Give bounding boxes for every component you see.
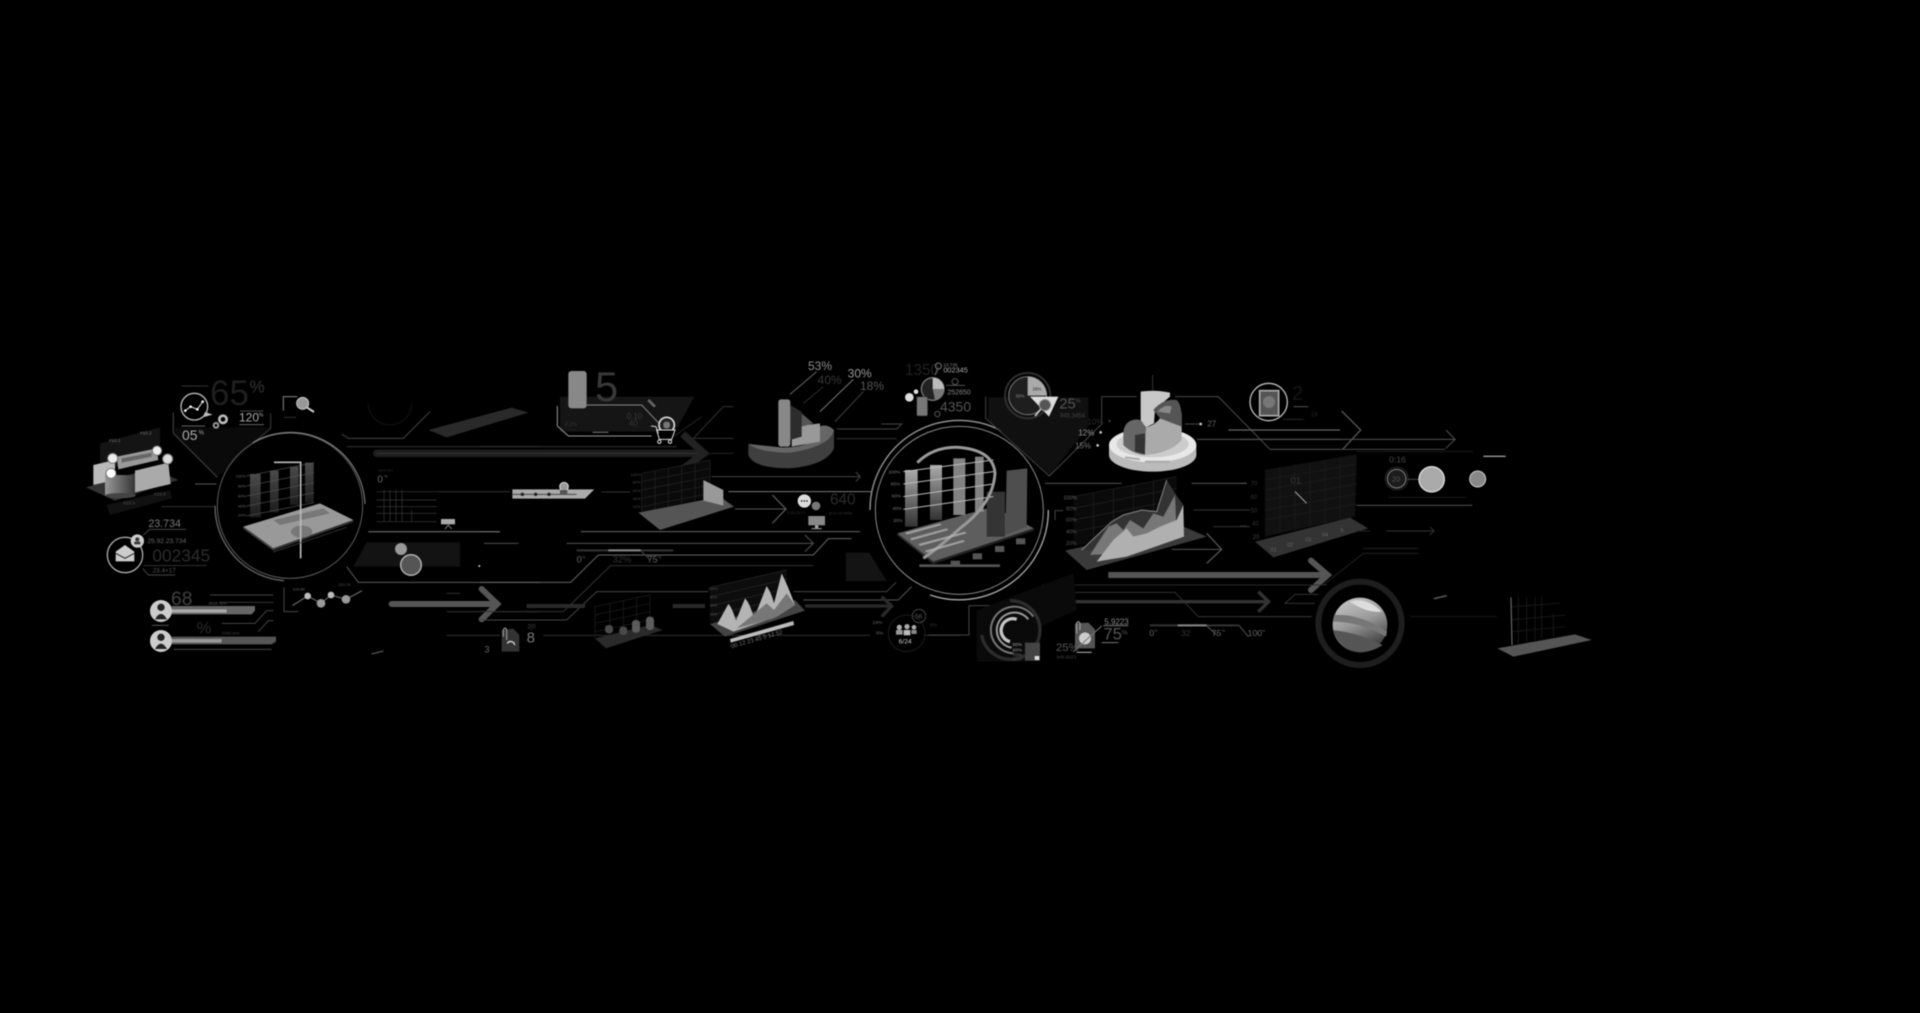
user progress bars [150,589,276,652]
region: middle-left section [480,359,960,655]
percentage labels [790,359,884,422]
file icon with stats: 25% [1056,642,1079,654]
pie panel: 945.3454 [1060,414,1086,420]
circuit lines: right [928,397,1340,635]
arrow: thick gray [392,589,497,619]
arrow: thin upper [712,472,860,482]
3D block chart: #10.3 [123,501,135,506]
tablet side details: 16 [1311,412,1318,419]
dial: main bar chart: 20% [893,518,903,523]
3D block chart: #10.1 [109,438,121,443]
icon: magnifier [283,397,314,417]
arrow: medium dark [1072,592,1269,612]
percentage labels: 53% [808,359,832,373]
phone and cart panel: 0.10 [627,412,643,421]
icon: tablet ring: 2 [1292,383,1303,405]
radial ring chart: 70% [1013,652,1022,657]
stats cluster: 4350: 252650 [947,389,971,396]
panel: 65 percent gauge: 65 [210,374,249,413]
dark grid chart [1251,454,1368,557]
panel: 65 percent gauge: % [259,413,264,419]
radial ring chart: 50% [1013,642,1022,647]
pie leader labels: 15% [1075,441,1091,450]
region: right section [1240,407,1592,665]
iso chart with panel: 60% [633,488,641,493]
mini line chart [292,582,362,608]
progress scale [577,550,673,565]
percentage labels: 18% [860,379,884,393]
small cylinder chart [595,594,663,648]
dark grid chart: 40 [1252,522,1259,528]
3D block chart: #10.2 [140,430,152,435]
small grid chart: 0 [377,474,383,485]
circle chart: left dial [215,432,365,581]
region: centre section [870,362,1340,662]
dark grid chart: 01 [1291,475,1301,485]
dial: main bar chart: 100% [888,469,900,474]
arrow: double chevrons [1240,411,1455,449]
circle chart: left dial: 60% [238,493,246,498]
circle indicators [1385,454,1486,492]
chat and monitor icon: 640 [830,491,856,508]
email counter: 23.4+17 [153,568,176,575]
3D block chart [86,427,178,515]
area chart: 80% [1066,507,1077,513]
area chart: 20% [1066,541,1077,547]
file icon with stats: % [1122,630,1128,637]
progress scale right [1149,625,1265,638]
panel: 65 percent gauge: 120 [239,411,259,425]
pie panel: 25% [1033,387,1041,392]
file icon with stats: 945.9223 [1057,655,1076,660]
pie leader labels [1075,417,1217,450]
dial: main bar chart [870,420,1048,600]
circuit lines [480,407,960,635]
chat and monitor icon: @12.23.4566 [828,511,853,516]
iso chart with panel: 100% [631,472,641,477]
stats cluster: 4350: 4350 [940,399,971,415]
dark grid chart: 70 [1251,482,1258,488]
progress scale: 32% [613,555,631,565]
mountain chart: 80% [710,595,718,599]
dark grid chart: 50 [1251,508,1258,514]
mountain chart: 40% [710,612,718,616]
team counter [872,609,938,652]
user progress bars: 2018.78% [208,600,227,605]
progress scale: 0 [577,555,582,565]
arrow: thin lower [567,535,813,552]
dark grid chart: 60 [1251,495,1258,501]
email counter: 002345 [152,546,210,566]
tablet side details [1283,407,1318,419]
dark grid chart: 03 [1305,538,1311,544]
file icon with stats [1056,617,1129,660]
email counter: 23.734 [148,518,181,530]
arrow: to people icon [728,492,872,523]
dark grid chart: 5 [1341,528,1344,534]
arrow: outline from chart [1172,533,1222,563]
area chart: 100% [1063,495,1077,501]
progress scale right: 0 [1149,628,1154,638]
progress scale right: % [1222,629,1225,633]
circle chart: left dial: 20% [238,513,246,518]
percentage labels: 30% [848,366,872,380]
region: left section [86,374,540,654]
ring-shaped 3D chart [748,399,834,468]
chat and monitor icon [787,491,856,529]
pie panel: 25 [1059,396,1076,412]
tick mark [372,651,383,654]
progress scale: % [582,555,586,559]
dark grid chart: 04 [1322,533,1328,539]
icon: file with paperclip: 8 [527,630,535,647]
area chart: 40% [1066,529,1077,535]
dial: main bar chart: 80% [891,481,900,486]
progress scale: 75 [647,555,658,565]
file icon with stats: 75 [1103,624,1122,643]
mini line chart: 120.80 [293,587,306,592]
arrow: thin dim [1387,527,1434,535]
user progress bars: 2266.00% [222,631,240,636]
striped sphere [1318,582,1402,665]
pie leader labels: 10% [1087,417,1103,426]
team counter: 6/24 [899,638,912,645]
mountain chart: 00 12 23 45 5 12 52 [731,630,784,650]
dark grid chart: 02 [1287,543,1293,549]
panel: 65 percent gauge: % [249,377,265,397]
mountain chart: 60% [710,604,718,608]
team counter: 5% [930,623,938,629]
stats cluster: 4350: 002345 [943,366,968,375]
circle indicators: 0:16 [1389,454,1406,464]
phone and cart panel: 5 [595,363,618,410]
phone and cart panel: 0.2% [565,422,577,428]
progress scale right: % [1154,629,1157,633]
icon: tablet ring [1250,383,1303,421]
stats cluster: 4350 [905,362,971,417]
dial: main bar chart: 40% [892,506,902,511]
icon: file with paperclip [484,625,536,655]
radial ring chart: 60% [1013,647,1022,652]
circle chart: left dial: 100% [236,473,246,478]
area chart [1063,477,1207,570]
email counter: 25.92.23.734 [147,538,186,545]
iso chart with panel: 20% [633,504,641,509]
team counter: 56 [915,613,923,620]
tick mark right [1434,596,1447,599]
team counter: 24% [872,620,883,626]
mountain chart: 100% [708,587,718,591]
small grid chart [377,468,510,529]
map strip [512,482,594,499]
phone and cart panel [557,363,694,443]
small grid chart: % [384,474,388,479]
connector lines: left [162,403,540,635]
iso chart with panel: 80% [633,479,641,484]
iso chart with panel [631,460,734,530]
phone and cart panel: 40 [629,419,638,428]
dial: main bar chart: 60% [892,493,901,498]
3D block chart: #10.4 [154,491,166,496]
dark grid chart: 20 [1253,535,1260,541]
pie panel [986,373,1137,476]
progress scale right: 100 [1248,628,1262,638]
circle indicators: 20 [1392,474,1400,483]
stats cluster: 4350: 23.735 [943,363,958,368]
lines: right column [1240,452,1506,617]
progress scale: % [658,555,662,559]
pie leader labels: 12% [1078,428,1094,437]
hatched trapezoid [846,553,887,581]
user progress bars: 68 [171,589,192,610]
arrow: large gray [1108,561,1328,590]
circle chart: left dial: 80% [238,483,246,488]
area chart: 60% [1066,518,1077,524]
progress scale right: 32 [1181,628,1191,638]
panel: 65 percent gauge [173,374,271,477]
circle chart: left dial: 40% [238,503,246,508]
progress scale right: % [1262,629,1265,633]
file icon with stats: 5.9223 [1104,617,1129,626]
radial ring chart: 80% [1013,657,1022,662]
pie panel: % [1075,399,1080,405]
team counter: 9% [876,631,884,637]
mountain chart [708,570,805,650]
icon: file with paperclip: 2|0 [527,625,536,631]
percentage labels: 40% [818,373,842,387]
pie leader labels: 27 [1207,420,1217,429]
hatched map panel with pins [353,542,480,575]
stats cluster: 4350: 1350 [905,362,939,379]
mini line chart: 223.74 [338,582,351,587]
iso chart with panel: 40% [633,496,641,501]
3D stacked pie [1109,375,1196,472]
panel: 65 percent gauge: % [199,431,205,437]
arrow: lower dim [805,597,892,617]
small grid chart: label text [378,468,393,472]
panel: 65 percent gauge: 05 [182,427,198,443]
icon: file with paperclip: 3 [484,645,490,655]
user progress bars: % [197,618,212,637]
long dim arrow [480,434,733,469]
progress scale right: 75 [1212,628,1221,638]
empty grid chart [1497,597,1592,657]
chat and monitor icon: 2.26.23.17 [787,510,806,515]
ribbon plate [428,408,528,437]
email counter [107,518,210,575]
radial ring chart [977,573,1077,662]
dark grid chart: 01 [1271,547,1277,553]
pie panel: 50% [1016,393,1025,398]
